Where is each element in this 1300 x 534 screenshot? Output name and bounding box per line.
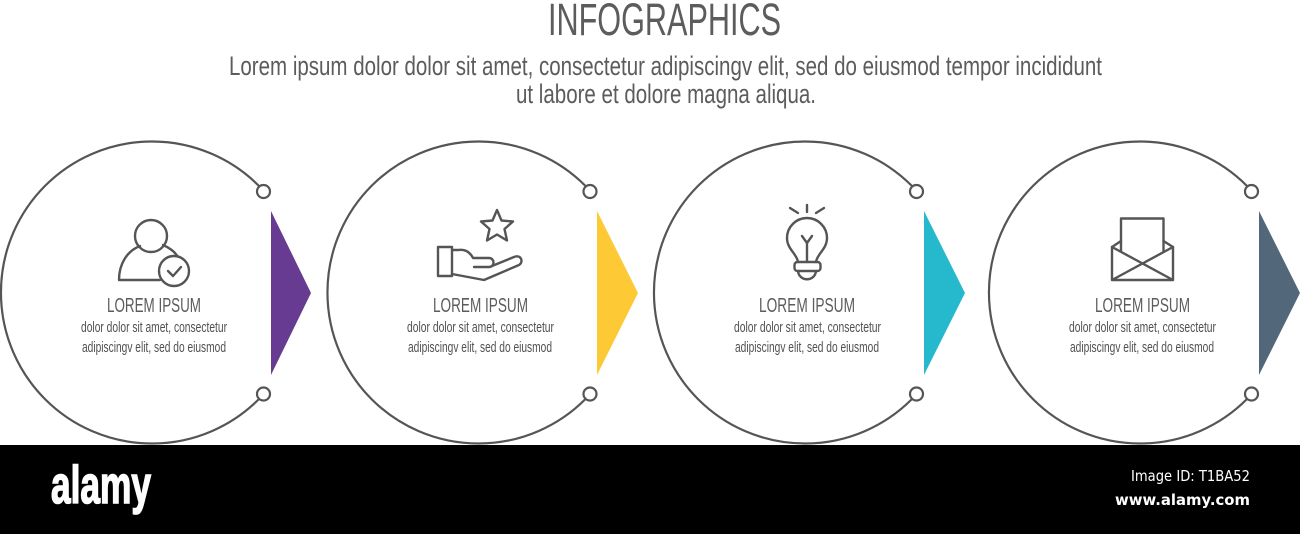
connector dot top — [1245, 185, 1258, 198]
description — [81, 320, 227, 356]
panel: step 1 — [1, 142, 311, 444]
icon: hand with star — [438, 210, 521, 280]
icon: open envelope — [1112, 218, 1173, 280]
connector dot top — [257, 185, 270, 198]
description: adipiscingv elit, sed do eiusmod — [1070, 340, 1214, 356]
description: dolor dolor sit amet, consectetur — [81, 320, 227, 336]
description — [734, 320, 881, 356]
description: dolor dolor sit amet, consectetur — [734, 320, 881, 336]
heading: LOREM IPSUM — [433, 295, 528, 317]
connector dot bottom — [584, 388, 596, 400]
icon: person with check — [119, 220, 189, 286]
connector dot top — [910, 185, 923, 198]
panel: step 2 — [327, 142, 638, 444]
panel: step 3 — [654, 142, 965, 444]
description: dolor dolor sit amet, consectetur — [407, 320, 554, 336]
website: www.alamy.com — [1115, 491, 1250, 509]
circle outline — [327, 142, 586, 444]
connector dot bottom — [910, 388, 923, 400]
description: dolor dolor sit amet, consectetur — [1069, 320, 1216, 336]
intro text: ut labore et dolore magna aliqua. — [516, 79, 816, 109]
icon: light bulb — [787, 205, 827, 279]
image id: Image ID: T1BA52 — [1131, 467, 1250, 485]
panel: step 4 — [989, 142, 1300, 444]
arrow: slate — [1259, 211, 1300, 375]
circle outline — [989, 142, 1247, 444]
connector dot top — [584, 185, 596, 198]
connector dot bottom — [1245, 388, 1258, 400]
arrow: yellow — [597, 211, 638, 375]
logo: alamy: alamy — [51, 456, 151, 515]
circle outline — [1, 142, 259, 444]
description: adipiscingv elit, sed do eiusmod — [408, 340, 552, 356]
heading: LOREM IPSUM — [107, 295, 201, 317]
arrow: teal — [924, 211, 965, 375]
description — [407, 320, 554, 356]
heading: LOREM IPSUM — [1095, 295, 1190, 317]
description: adipiscingv elit, sed do eiusmod — [82, 340, 226, 356]
footer bar — [0, 445, 1300, 534]
intro text — [229, 51, 1102, 109]
arrow: purple — [271, 211, 311, 375]
heading: LOREM IPSUM — [759, 295, 855, 317]
description: adipiscingv elit, sed do eiusmod — [735, 340, 879, 356]
connector dot bottom — [257, 388, 270, 400]
description — [1069, 320, 1216, 356]
circle outline — [654, 142, 912, 444]
